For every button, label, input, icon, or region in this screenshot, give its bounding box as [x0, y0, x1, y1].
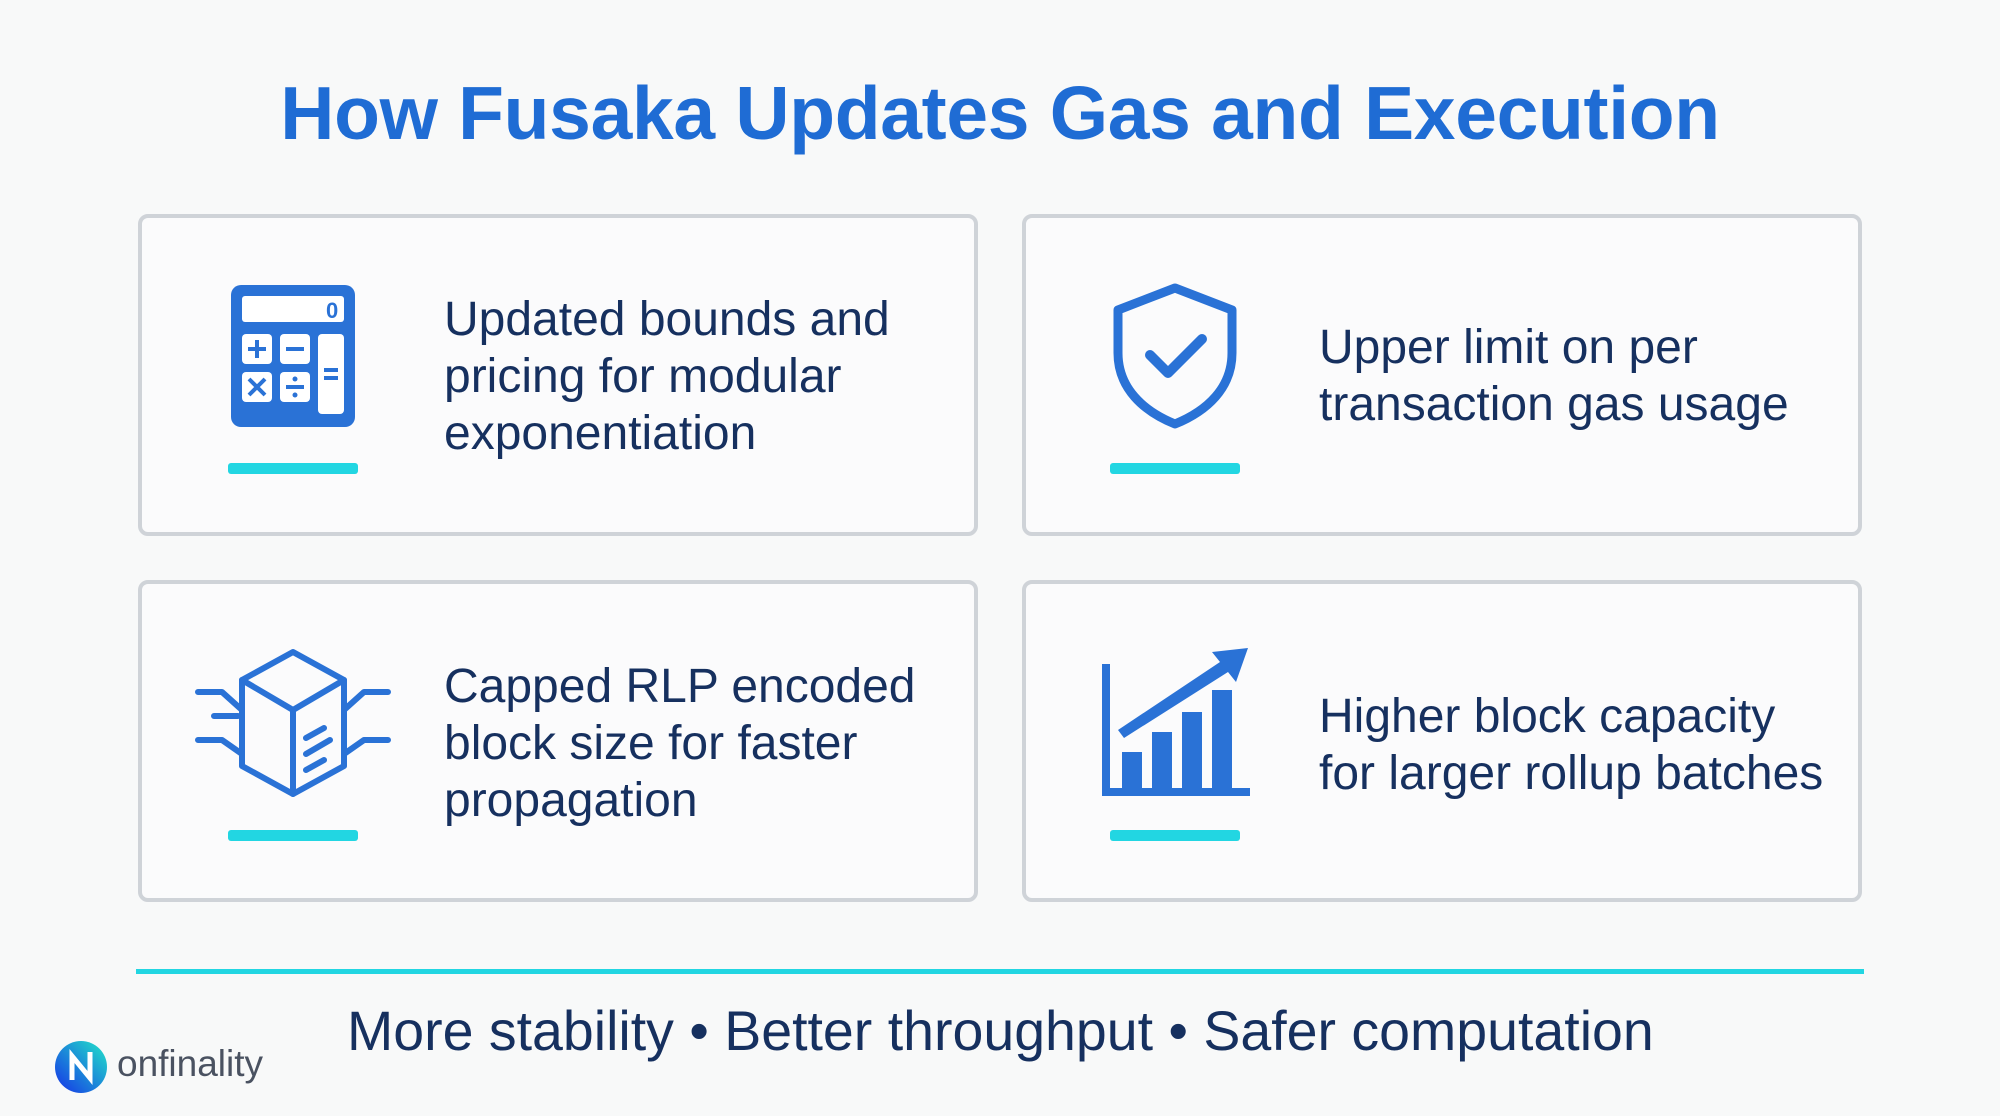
title: How Fusaka Updates Gas and Execution: [280, 71, 1720, 155]
icon: shield: [1114, 284, 1236, 428]
divider line: [136, 969, 1864, 974]
text: modular exponentiation: exponentiation: [444, 407, 756, 460]
text: block capacity: Higher block capacity: [1319, 690, 1775, 743]
text: gas limit: [1319, 321, 1789, 431]
text: RLP: block size for faster: [444, 717, 857, 770]
logo: onfinality: [117, 1043, 263, 1084]
text: modular exponentiation: [444, 293, 890, 460]
text: gas limit: transaction gas usage: [1319, 378, 1789, 431]
icon: calculator: 0: [326, 298, 338, 323]
underline: [228, 830, 358, 841]
text: modular exponentiation: pricing for modular: [444, 350, 842, 403]
underline: [228, 463, 358, 474]
text: block capacity: for larger rollup batches: [1319, 747, 1823, 800]
text: RLP: propagation: [444, 774, 698, 827]
tagline: More stability • Better throughput • Safer computation: [347, 1000, 1654, 1062]
logo: [55, 1041, 263, 1093]
text: block capacity: [1319, 690, 1823, 800]
icon: calculator: [231, 285, 355, 427]
text: modular exponentiation: Updated bounds and: [444, 293, 890, 346]
panel: RLP block size: [138, 580, 978, 902]
underline: [1110, 463, 1240, 474]
text: gas limit: Upper limit on per: [1319, 321, 1698, 374]
text: RLP: Capped RLP encoded: [444, 660, 916, 713]
panel: modular exponentiation: [138, 214, 978, 536]
panel: block capacity: [1022, 580, 1862, 902]
text: RLP: [444, 660, 916, 827]
icon: bar chart: [1102, 648, 1250, 796]
panel: gas limit: [1022, 214, 1862, 536]
icon: cube: [195, 649, 391, 797]
underline: [1110, 830, 1240, 841]
